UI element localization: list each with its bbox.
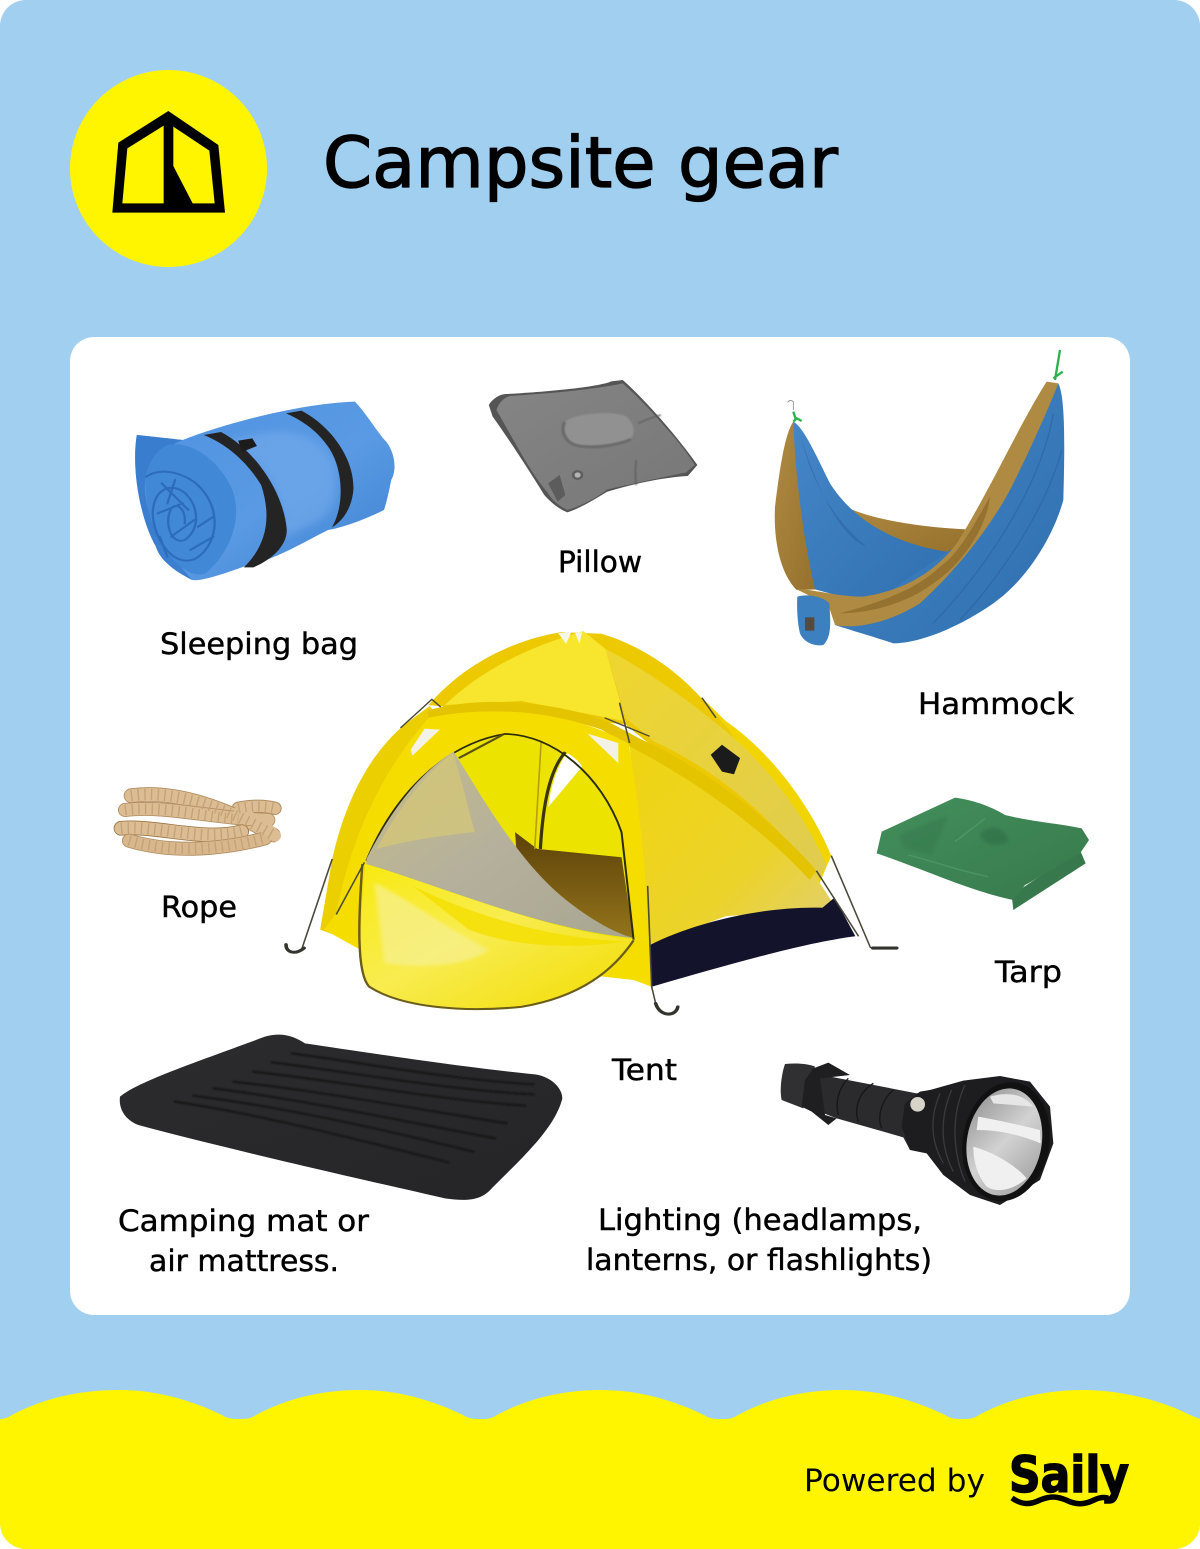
vent patches	[411, 729, 440, 755]
item: flashlight	[781, 1063, 1059, 1208]
item: tarp	[877, 798, 1089, 910]
header icon: tent in yellow circle	[70, 70, 267, 267]
hook cords	[793, 350, 1063, 422]
pull tab	[711, 745, 740, 774]
item: camping mat	[120, 1035, 562, 1200]
label: Pillow: Pillow	[558, 545, 642, 579]
title: Campsite gear	[323, 122, 838, 204]
door flap	[361, 864, 634, 1009]
item: hammock	[775, 350, 1064, 645]
label: Hammock: Hammock	[918, 687, 1074, 721]
label: Camping mat or air mattress: air mattress.	[149, 1244, 339, 1278]
right side panel	[630, 745, 832, 945]
tent poles	[302, 698, 871, 1004]
door interior	[366, 734, 634, 940]
label: Tarp: Tarp	[994, 955, 1062, 989]
straps	[204, 432, 287, 567]
footer credit: Powered by: Powered by	[804, 1463, 985, 1499]
label: Lighting: lanterns, or flashlights)	[586, 1243, 932, 1277]
label: Camping mat or air mattress	[118, 1204, 369, 1278]
label: Camping mat or air mattress: Camping mat or	[118, 1204, 369, 1238]
arch band	[428, 702, 816, 880]
mesh door	[366, 751, 634, 938]
label: Lighting: Lighting (headlamps,	[598, 1203, 922, 1237]
dome top	[429, 632, 818, 883]
label: Lighting	[586, 1203, 932, 1277]
label: Tent: Tent	[611, 1053, 677, 1087]
top vent	[558, 632, 582, 644]
logo: Saily: Saily	[1009, 1446, 1129, 1504]
rear wing	[320, 706, 441, 945]
front panel	[324, 711, 652, 987]
item: rope	[121, 794, 275, 849]
pouch	[797, 595, 830, 645]
item: tent	[286, 631, 897, 1014]
label: Rope: Rope	[161, 890, 237, 924]
stakes	[286, 945, 897, 1014]
label: Sleeping bag: Sleeping bag	[160, 627, 358, 661]
panel: gear list	[70, 337, 1130, 1315]
base: navy groundsheet	[650, 898, 855, 987]
footer wave band	[0, 1390, 1200, 1549]
item: pillow	[489, 380, 697, 512]
item: sleeping bag	[135, 402, 395, 580]
